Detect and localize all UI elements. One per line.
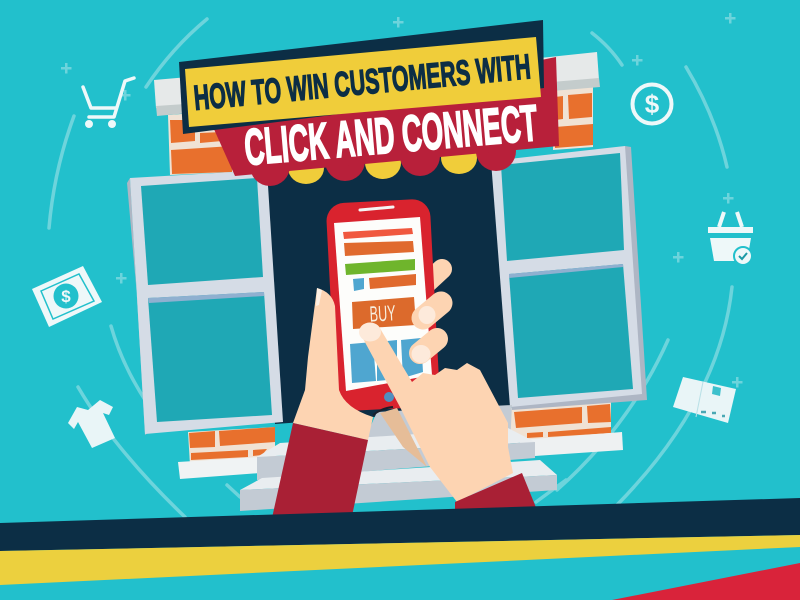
yellow banner — [185, 37, 541, 127]
bottom navy stripe — [0, 498, 800, 551]
entrance steps — [240, 405, 557, 511]
yellow scallops — [288, 142, 477, 184]
right window — [491, 146, 647, 410]
bottom yellow stripe — [0, 535, 800, 585]
top finger behind phone — [428, 269, 442, 282]
smartphone — [326, 198, 440, 412]
left hand palm and thumb — [293, 288, 373, 440]
phone body — [326, 198, 440, 412]
fingers gripping phone — [420, 303, 441, 353]
left window — [127, 170, 283, 435]
shop doorway — [262, 150, 515, 424]
brick wall: lower right — [510, 402, 611, 442]
window ledge: right — [520, 432, 623, 457]
icon: banknote: $ — [61, 287, 71, 306]
bottom red corner — [612, 563, 800, 600]
decorative orbit arcs — [49, 19, 732, 517]
icon: t-shirt — [68, 400, 115, 448]
buy button — [352, 297, 416, 329]
bottom step — [240, 460, 557, 511]
awning and red banner — [213, 57, 559, 186]
icon: shopping basket — [708, 212, 753, 265]
window ledge: left — [178, 457, 260, 479]
brick wall: lower left — [188, 427, 275, 465]
icon: dollar coin — [632, 84, 672, 124]
right hand pointing — [359, 322, 513, 502]
heading: how to win customers with: HOW TO WIN CUSTOMERS WITH — [192, 47, 532, 118]
red scallops — [250, 131, 516, 186]
icon: parcel box — [673, 377, 736, 423]
plus signs — [61, 13, 742, 388]
speaker — [360, 207, 393, 210]
brick wall: upper left — [168, 110, 235, 175]
left sleeve — [272, 423, 368, 518]
heading: click and connect: CLICK AND CONNECT — [242, 94, 540, 176]
middle step — [257, 428, 535, 480]
top step — [362, 405, 512, 445]
navy banner — [179, 20, 544, 134]
screen — [334, 217, 432, 391]
product tiles — [350, 338, 423, 383]
icon: shopping cart — [83, 78, 134, 128]
right sleeve — [455, 473, 537, 512]
wrist shadow — [373, 407, 427, 467]
roof cap: right — [540, 52, 600, 92]
roof cap: left — [154, 76, 200, 116]
icon: banknote — [32, 266, 102, 327]
brick wall: upper right — [553, 85, 593, 150]
buy button: BUY — [369, 300, 396, 327]
icon: dollar coin: $ — [645, 89, 660, 119]
home button — [384, 392, 394, 402]
index fingernail — [359, 322, 381, 342]
content bars — [343, 228, 416, 291]
red banner — [213, 57, 559, 176]
thumbnail — [316, 288, 322, 306]
finger nails — [412, 306, 436, 363]
